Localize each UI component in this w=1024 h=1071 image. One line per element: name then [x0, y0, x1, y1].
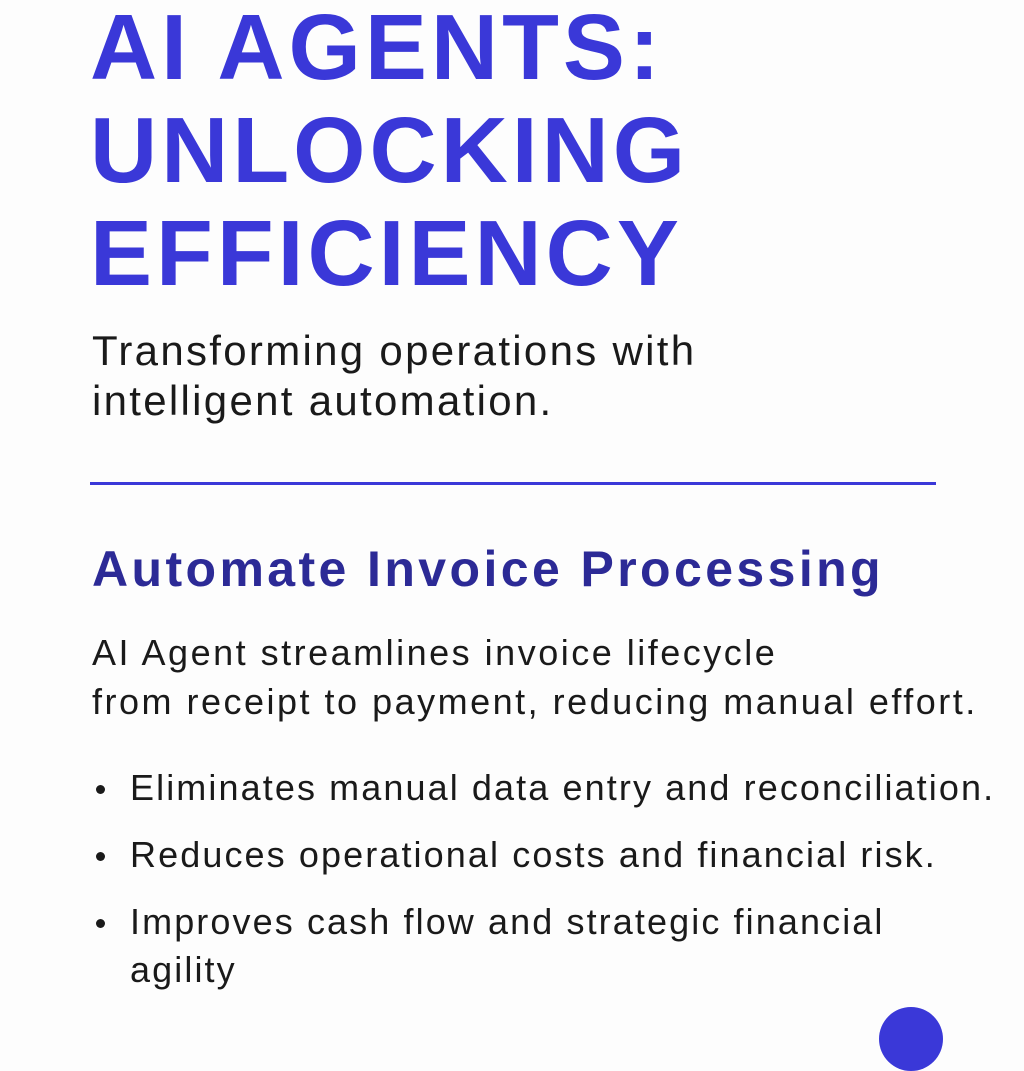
- subtitle: [92, 327, 696, 424]
- description text: [92, 632, 978, 722]
- description text: AI Agent streamlines invoice lifecycle: [92, 632, 777, 673]
- subtitle: intelligent automation.: [92, 377, 554, 424]
- heading: automate invoice processing: Automate Invoice Processing: [92, 541, 884, 597]
- title: [90, 0, 689, 305]
- bullet list: agility: [130, 949, 237, 990]
- bullet list: [96, 767, 995, 990]
- title: UNLOCKING: [90, 98, 689, 202]
- subtitle: Transforming operations with: [92, 327, 696, 374]
- description text: from receipt to payment, reducing manual effort.: [92, 681, 978, 722]
- bullet list: Eliminates manual data entry and reconciliation.: [130, 767, 995, 808]
- icon: blue circle: [879, 1007, 943, 1071]
- bullet list: Reduces operational costs and financial risk.: [130, 834, 937, 875]
- title: EFFICIENCY: [90, 201, 683, 305]
- bullet list: Improves cash flow and strategic financial: [130, 901, 885, 942]
